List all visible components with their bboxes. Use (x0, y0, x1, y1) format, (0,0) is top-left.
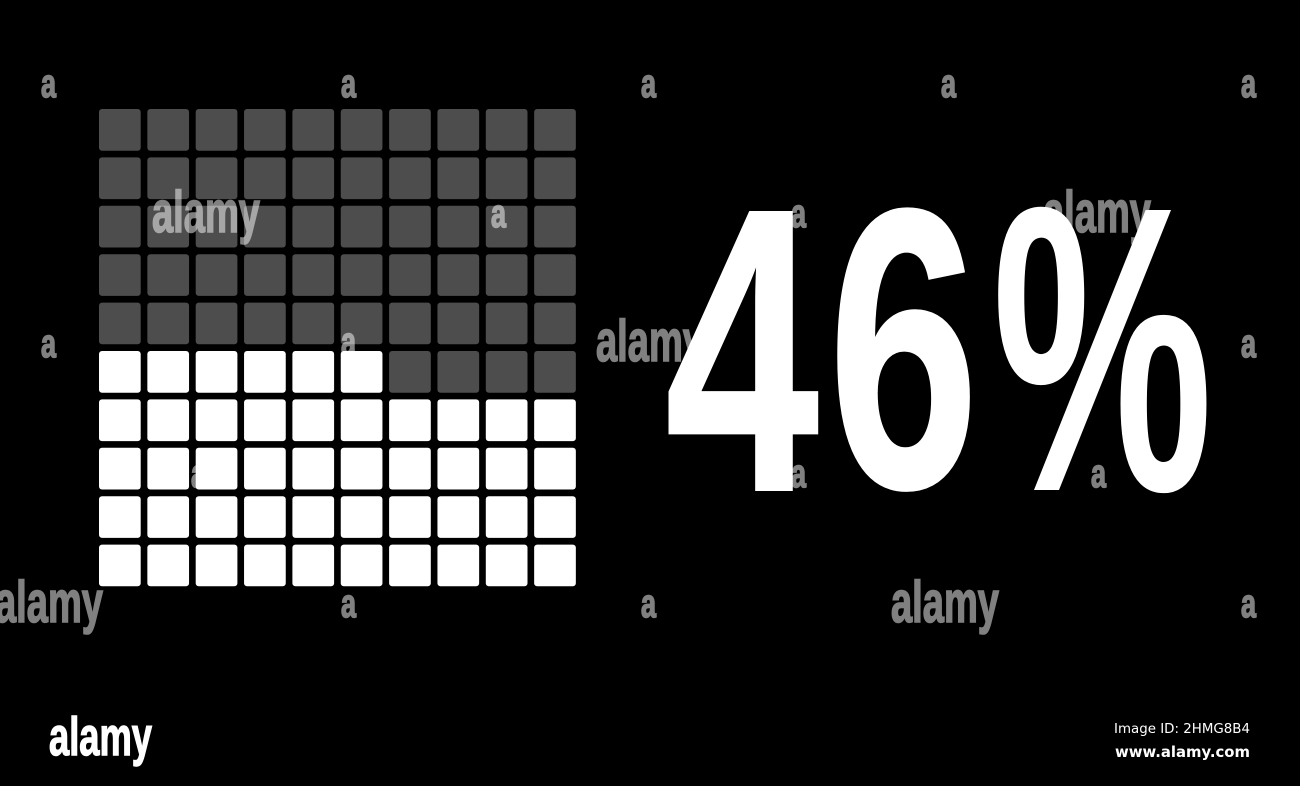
large watermark words: alamy (891, 570, 999, 635)
small repeated watermark letters: a (491, 452, 507, 496)
small repeated watermark letters (41, 62, 1257, 626)
filled squares (46) (99, 351, 576, 586)
unfilled squares (54) (99, 109, 576, 393)
small repeated watermark letters: a (41, 62, 57, 106)
watermark: stock-photo marks (0, 62, 1257, 635)
website url: www.alamy.com (1115, 743, 1250, 761)
small repeated watermark letters: a (1091, 452, 1107, 496)
small repeated watermark letters: a (941, 62, 957, 106)
image id: Image ID: 2HMG8B4 (1114, 722, 1250, 737)
big percentage figure (665, 123, 1213, 577)
alamy logo: alamy (49, 707, 152, 767)
small repeated watermark letters: a (491, 192, 507, 236)
digit 6: 6 (828, 126, 979, 572)
small repeated watermark letters: a (641, 582, 657, 626)
small repeated watermark letters: a (41, 322, 57, 366)
small repeated watermark letters: a (1241, 322, 1257, 366)
small repeated watermark letters: a (341, 62, 357, 106)
large watermark words: alamy (596, 309, 704, 374)
small repeated watermark letters: a (341, 320, 357, 364)
small repeated watermark letters: a (1241, 582, 1257, 626)
small repeated watermark letters: a (1241, 62, 1257, 106)
digit 4: 4 (665, 124, 821, 576)
large watermark words: alamy (152, 180, 260, 245)
small repeated watermark letters: a (191, 452, 207, 496)
small repeated watermark letters: a (341, 582, 357, 626)
small repeated watermark letters: a (791, 192, 807, 236)
large watermark words (0, 180, 1151, 635)
waffle chart: 46 of 100 squares filled (99, 109, 576, 586)
small repeated watermark letters: a (641, 62, 657, 106)
small repeated watermark letters: a (791, 452, 807, 496)
large watermark words: alamy (1043, 180, 1151, 245)
